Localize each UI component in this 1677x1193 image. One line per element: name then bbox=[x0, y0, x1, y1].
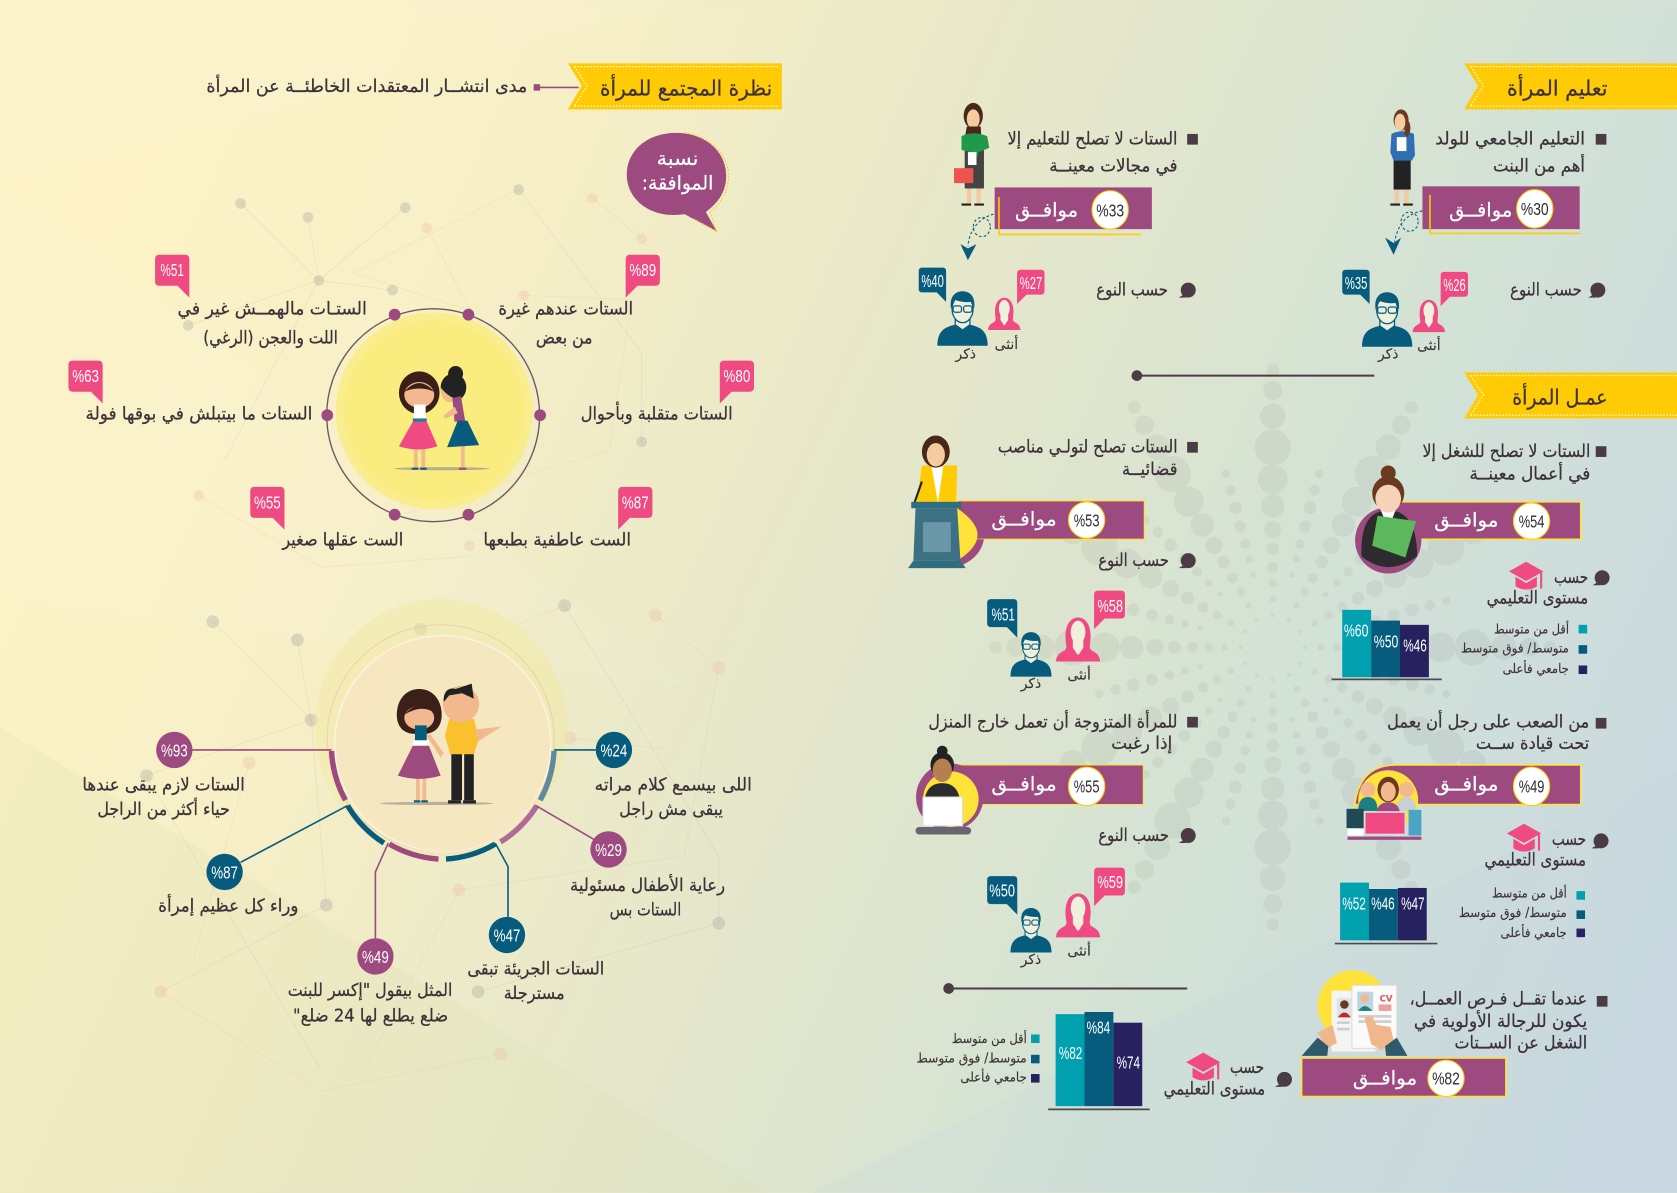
divider: top bbox=[1132, 370, 1374, 381]
bar chart: 60 50 46: %46 bbox=[1403, 637, 1427, 656]
male and female icons: ذكر bbox=[1020, 952, 1041, 968]
agree box: 82% bbox=[1302, 1058, 1506, 1096]
agree box: 55%: موافــق bbox=[991, 773, 1057, 796]
bar chart: 82 84 74: %74 bbox=[1117, 1054, 1140, 1073]
male and female icons bbox=[1342, 270, 1468, 363]
legend: أقل من متوسط bbox=[952, 1030, 1027, 1047]
statement text bbox=[1435, 130, 1606, 176]
item: 49%: %49 bbox=[362, 948, 389, 967]
by education label: مستوى التعليمي bbox=[1164, 1079, 1265, 1099]
circle diagram: misconceptions bbox=[68, 255, 754, 551]
agree box: 30%: %30 bbox=[1521, 200, 1549, 219]
bar chart: 60 50 46: %50 bbox=[1374, 632, 1398, 651]
by gender label: حسب النوع bbox=[1098, 826, 1169, 846]
bar chart: 60 50 46: %60 bbox=[1344, 622, 1368, 641]
agree box: 33%: %33 bbox=[1096, 201, 1124, 220]
male and female icons: %27 bbox=[1020, 274, 1042, 293]
male and female icons: ذكر bbox=[1377, 347, 1398, 363]
legend: جامعي فأعلى bbox=[1503, 660, 1569, 677]
item: 29% bbox=[536, 806, 725, 921]
agree box: 49%: موافــق bbox=[1434, 773, 1498, 796]
agree box: 53%: موافــق bbox=[991, 507, 1057, 530]
statement text: قضائيــة bbox=[1122, 460, 1178, 480]
item: 55% bbox=[250, 487, 403, 551]
statement text bbox=[1007, 130, 1198, 176]
male and female icons: %58 bbox=[1097, 597, 1123, 616]
decorative dotted mandala bbox=[989, 364, 1556, 931]
item: 29%: الستات بس bbox=[610, 901, 681, 921]
legend: جامعي فأعلى bbox=[960, 1069, 1027, 1086]
male and female icons bbox=[987, 868, 1125, 968]
agree box: 30% bbox=[1422, 186, 1580, 233]
item: 49% bbox=[288, 843, 452, 1027]
item: 80% bbox=[581, 361, 754, 424]
item: 87%: %87 bbox=[211, 863, 238, 882]
item: 93%: %93 bbox=[161, 741, 188, 760]
speech bubble: agreement rate: نسبة bbox=[657, 147, 698, 170]
male and female icons: %51 bbox=[991, 606, 1015, 625]
by education label: حسب bbox=[1552, 830, 1586, 850]
agree box: 33%: موافــق bbox=[1015, 198, 1078, 221]
agree box: 53% bbox=[957, 501, 1144, 565]
agree box: 54%: موافــق bbox=[1434, 508, 1498, 531]
bar chart: 82 84 74: %82 bbox=[1059, 1044, 1082, 1063]
statement text: من الصعب على رجل أن يعمل bbox=[1387, 710, 1589, 733]
male and female icons: ذكر bbox=[955, 347, 976, 363]
item: 47% bbox=[467, 843, 604, 1004]
item: 87% bbox=[483, 487, 652, 551]
statement text: إذا رغبت bbox=[1111, 734, 1172, 754]
bar chart: 52 46 47: %46 bbox=[1371, 894, 1395, 913]
disc with ring segments bbox=[314, 599, 567, 859]
statement text: الشغل عن الســتات bbox=[1455, 1033, 1587, 1053]
bar chart: 52 46 47: %47 bbox=[1401, 894, 1425, 913]
by education label bbox=[1487, 562, 1610, 608]
item: 51% bbox=[155, 255, 367, 349]
item: 87%: %87 bbox=[622, 493, 649, 512]
figure: woman with laptop bbox=[916, 746, 979, 834]
item: 51%: %51 bbox=[160, 261, 184, 280]
male and female icons: أنثى bbox=[995, 335, 1018, 353]
item: 87%: وراء كل عظيم إمرأة bbox=[158, 893, 298, 916]
heading ribbon: education: تعليم المرأة bbox=[1507, 74, 1608, 101]
bar chart: 52 46 47: %52 bbox=[1342, 894, 1366, 913]
item: 29%: رعاية الأطفال مسئولية bbox=[570, 874, 725, 896]
by education label bbox=[1164, 1053, 1292, 1099]
agree box: 82%: %82 bbox=[1432, 1070, 1460, 1089]
item: 29%: %29 bbox=[595, 841, 622, 860]
statement text: الستات لا تصلح للتعليم إلا bbox=[1007, 130, 1178, 150]
agree box: 33% bbox=[995, 187, 1152, 234]
dashed arrow bbox=[1385, 211, 1422, 255]
bar chart: 60 50 46 bbox=[1332, 610, 1442, 679]
statement: women fit only certain fields bbox=[919, 103, 1198, 363]
male and female icons: %40 bbox=[921, 272, 944, 291]
male and female icons: %50 bbox=[989, 881, 1015, 900]
item: 80%: %80 bbox=[724, 367, 750, 386]
agree box: 54% bbox=[1388, 502, 1581, 539]
statement text bbox=[998, 438, 1198, 480]
male and female icons bbox=[919, 268, 1044, 363]
speech bubble: agreement rate: الموافقة: bbox=[642, 172, 713, 195]
male and female icons bbox=[987, 591, 1125, 692]
heading ribbon: education bbox=[1464, 63, 1677, 109]
panel: women's education bbox=[919, 63, 1677, 363]
panel: society's view of women bbox=[68, 63, 782, 1027]
dashed arrow bbox=[960, 214, 994, 260]
illustration: two girls whispering bbox=[394, 366, 490, 470]
item: 87%: الست عاطفية بطبعها bbox=[483, 531, 631, 551]
item: 93%: الستات لازم يبقى عندها bbox=[82, 776, 245, 796]
item: 63%: %63 bbox=[72, 367, 99, 386]
subheading with connector: مدى انتشــار المعتقدات الخاطئــة عن المرأة bbox=[206, 74, 527, 97]
item: 24% bbox=[554, 732, 752, 820]
decorative network of dots bbox=[140, 184, 725, 1091]
by education label bbox=[1484, 824, 1609, 870]
legend bbox=[1459, 885, 1585, 941]
item: 89%: الستات عندهم غيرة bbox=[498, 300, 633, 320]
item: 47%: %47 bbox=[494, 926, 520, 945]
male and female icons: %59 bbox=[1097, 873, 1123, 892]
bar chart: 52 46 47 bbox=[1335, 883, 1437, 944]
item: 87% bbox=[158, 806, 348, 916]
item: 24%: يبقى مش راجل bbox=[619, 800, 723, 820]
divider: bottom bbox=[943, 983, 1187, 994]
by gender label: حسب النوع bbox=[1096, 280, 1168, 300]
statement text bbox=[1387, 710, 1606, 754]
ring with yellow disc bbox=[321, 309, 546, 522]
agree box: 30%: موافــق bbox=[1449, 198, 1512, 221]
by education label: حسب bbox=[1554, 568, 1588, 588]
male and female icons: أنثى bbox=[1067, 665, 1091, 683]
statement text: التعليم الجامعي للولد bbox=[1435, 130, 1585, 150]
item: 49%: ضلع يطلع لها 24 ضلع" bbox=[293, 1007, 448, 1027]
illustration: couple bbox=[380, 684, 502, 805]
item: 89%: من بعض bbox=[536, 329, 593, 349]
heading ribbon: work bbox=[1464, 372, 1677, 418]
statement text bbox=[928, 710, 1198, 754]
item: 80%: الستات متقلبة وبأحوال bbox=[581, 401, 733, 424]
figure: woman in green bbox=[954, 103, 989, 206]
heading ribbon: society's view: نظرة المجتمع للمرأة bbox=[600, 74, 772, 101]
male and female icons: ذكر bbox=[1020, 676, 1041, 692]
item: 24%: %24 bbox=[601, 741, 628, 760]
statement: married woman working outside bbox=[916, 710, 1198, 968]
statement text: للمرأة المتزوجة أن تعمل خارج المنزل bbox=[928, 710, 1178, 733]
bar chart: 82 84 74 bbox=[1048, 1012, 1150, 1109]
by education label: حسب bbox=[1230, 1058, 1264, 1078]
by education label: مستوى التعليمي bbox=[1484, 850, 1586, 870]
statement: man working under a woman bbox=[1335, 710, 1609, 944]
agree box: 55%: %55 bbox=[1074, 778, 1099, 797]
agree box: 49% bbox=[1354, 765, 1581, 818]
statement text bbox=[1422, 442, 1606, 484]
item: 24%: اللى بيسمع كلام مراته bbox=[595, 776, 752, 796]
legend bbox=[1461, 620, 1587, 677]
item: 47%: الستات الجريئة تبقى bbox=[467, 960, 604, 980]
male and female icons: أنثى bbox=[1417, 336, 1441, 354]
statement: fit only certain jobs bbox=[1332, 442, 1610, 679]
item: 47%: مسترجلة bbox=[504, 984, 565, 1004]
statement text: في أعمال معينــة bbox=[1470, 461, 1590, 484]
legend bbox=[917, 1030, 1040, 1086]
legend: متوسط/ فوق متوسط bbox=[1459, 906, 1567, 921]
figure: hands holding CVs bbox=[1302, 970, 1407, 1056]
male and female icons: %26 bbox=[1443, 276, 1466, 295]
by gender label: حسب النوع bbox=[1098, 551, 1169, 571]
item: 89%: %89 bbox=[629, 261, 656, 280]
item: 93%: حياء أكثر من الراجل bbox=[97, 797, 230, 820]
agree box: 53%: %53 bbox=[1074, 511, 1099, 530]
item: 49%: المثل بيقول "إكسر للبنت bbox=[288, 981, 452, 1001]
male and female icons: %35 bbox=[1345, 274, 1367, 293]
figure: hands holding CVs: CV bbox=[1380, 994, 1393, 1004]
by education label: مستوى التعليمي bbox=[1487, 588, 1588, 608]
statement text: تحت قيادة ســت bbox=[1476, 734, 1589, 754]
item: 51%: الستـات مالهمــش غير في bbox=[178, 300, 367, 320]
panel: women's work bbox=[908, 372, 1677, 1109]
statement text: الستات لا تصلح للشغل إلا bbox=[1422, 442, 1590, 462]
heading ribbon: society's view bbox=[568, 63, 782, 109]
heading ribbon: work: عمـل المرأة bbox=[1512, 384, 1607, 411]
agree box: 49%: %49 bbox=[1519, 778, 1544, 797]
statement text bbox=[1410, 990, 1607, 1053]
item: 63% bbox=[68, 361, 312, 424]
legend: متوسط/ فوق متوسط bbox=[1461, 642, 1569, 657]
legend: أقل من متوسط bbox=[1494, 620, 1569, 637]
agree box: 82%: موافــق bbox=[1353, 1067, 1417, 1090]
item: 55%: الست عقلها صغير bbox=[281, 531, 403, 551]
statement text: الستات تصلح لتولـي مناصب bbox=[998, 438, 1178, 458]
item: 93% bbox=[82, 732, 332, 820]
agree box: 54%: %54 bbox=[1519, 513, 1545, 532]
figure: woman at podium bbox=[908, 436, 978, 568]
item: 51%: اللت والعجن (الرغي) bbox=[203, 329, 338, 349]
statement text: أهم من البنت bbox=[1493, 153, 1585, 176]
item: 63%: الستات ما بيتبلش في بوقها فولة bbox=[86, 404, 312, 424]
legend: جامعي فأعلى bbox=[1501, 924, 1567, 941]
speech bubble: agreement rate bbox=[627, 133, 728, 231]
statement text: في مجالات معينــة bbox=[1049, 156, 1178, 176]
statement: women fit judicial posts bbox=[908, 436, 1198, 692]
by gender label: حسب النوع bbox=[1510, 280, 1582, 300]
bar chart: 82 84 74: %84 bbox=[1087, 1018, 1110, 1037]
legend: أقل من متوسط bbox=[1492, 885, 1567, 902]
figure: woman in blue bbox=[1390, 109, 1415, 206]
statement text: عندما تقــل فـرص العمــل، bbox=[1410, 990, 1587, 1010]
figure: office team bbox=[1347, 770, 1421, 840]
item: 89% bbox=[498, 255, 660, 349]
legend: متوسط/ فوق متوسط bbox=[917, 1051, 1027, 1066]
circle diagram: gender roles bbox=[82, 599, 752, 1027]
agree box: 55% bbox=[916, 763, 1143, 831]
statement: men prioritized when jobs are scarce bbox=[917, 970, 1607, 1109]
statement text: يكون للرجالة الأولوية في bbox=[1414, 1010, 1587, 1032]
item: 55%: %55 bbox=[254, 493, 281, 512]
figure: woman with folder bbox=[1355, 465, 1421, 574]
male and female icons: أنثى bbox=[1067, 941, 1091, 959]
statement: university education for sons bbox=[1342, 109, 1606, 363]
